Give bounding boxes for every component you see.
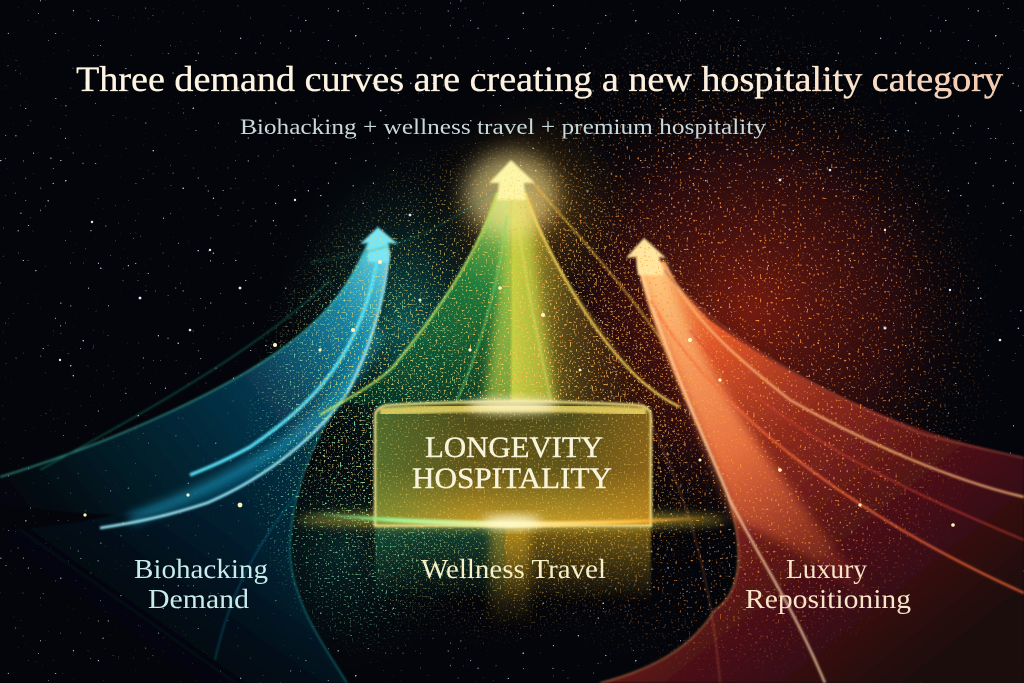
label: biohacking demand (134, 554, 268, 614)
heading: block label (412, 431, 612, 495)
icon: blue arrowhead (360, 227, 398, 262)
glitter overlay (244, 17, 995, 683)
label: luxury repositioning (745, 554, 911, 614)
icon: orange arrowhead (626, 238, 666, 275)
title: Three demand curves are creating a new hospitality category (76, 59, 1003, 99)
icon: yellow arrowhead (489, 160, 535, 200)
label: biohacking demand: Biohacking (134, 554, 268, 584)
sparkles around the block (83, 260, 955, 527)
curve: orange luxury repositioning with arrow (600, 238, 1024, 683)
reflection below the block (375, 527, 651, 627)
label: biohacking demand: Demand (148, 584, 250, 614)
label: luxury repositioning: Repositioning (745, 584, 911, 614)
panel: longevity hospitality glass block (297, 399, 727, 627)
label: wellness travel: Wellness Travel (421, 554, 606, 584)
heading: block label: LONGEVITY (425, 431, 603, 464)
curve: blue biohacking demand with arrow (0, 227, 398, 683)
subtitle: Biohacking + wellness travel + premium hospitality (240, 114, 766, 139)
curve: green and yellow wellness travel with arrow (310, 153, 700, 415)
label: luxury repositioning: Luxury (786, 554, 868, 584)
lower dark blue fan (0, 393, 347, 683)
heading: block label: HOSPITALITY (412, 462, 612, 495)
